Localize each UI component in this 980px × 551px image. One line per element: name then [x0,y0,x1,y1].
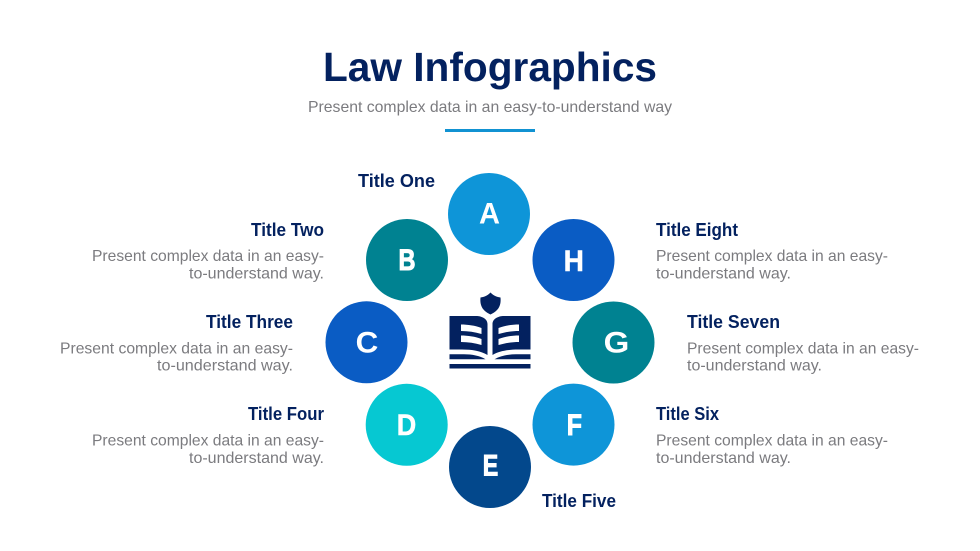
text block: title three [60,312,293,375]
circle H: H [564,245,584,278]
circle C [326,301,408,383]
text block: title eight [656,220,888,282]
text block: title eight: Title Eight [656,220,738,240]
text block: title four: to-understand way. [189,450,324,467]
title: Law Infographics [323,44,657,90]
circle A: A [479,198,500,230]
circle B [366,219,448,301]
text block: title eight: to-understand way. [656,266,791,282]
circle D: D [397,409,416,442]
text block: title six: Title Six [656,404,719,424]
circle G: G [604,327,629,360]
icon: law book with shield [450,292,530,368]
circle H [532,219,614,301]
text block: title two [92,220,324,282]
text block: title four: Present complex data in an easy- [92,432,324,450]
icon: open book [450,316,530,368]
text block: title two: to-understand way. [189,266,324,282]
circle G [572,302,654,384]
title underline [445,129,535,132]
text block: title three: Title Three [206,312,293,332]
text block: title eight: Present complex data in an easy- [656,248,888,265]
text block: title six: Present complex data in an easy- [656,432,888,450]
text block: title six: to-understand way. [656,450,791,467]
circle C: C [356,327,378,360]
circle E: E [483,449,498,482]
text block: title seven: Title Seven [687,312,780,332]
circle B: B [398,244,416,277]
text block: title three: Present complex data in an easy- [60,340,293,357]
circle F [532,384,614,466]
circle F: F [567,409,582,442]
label: title five: Title Five [542,491,616,511]
label: title one: Title One [358,171,435,191]
text block: title three: to-understand way. [157,358,293,375]
text block: title seven: to-understand way. [687,358,822,375]
circle A [448,173,530,255]
subtitle: Present complex data in an easy-to-understand way [308,99,672,116]
text block: title four: Title Four [248,404,324,424]
circle E [449,426,531,508]
text block: title seven [687,312,919,375]
text block: title seven: Present complex data in an easy- [687,340,919,357]
circle D [366,384,448,466]
icon: shield [480,292,501,314]
text block: title four [92,404,324,467]
text block: title two: Present complex data in an easy- [92,248,324,265]
text block: title six [656,404,888,467]
text block: title two: Title Two [251,220,324,240]
